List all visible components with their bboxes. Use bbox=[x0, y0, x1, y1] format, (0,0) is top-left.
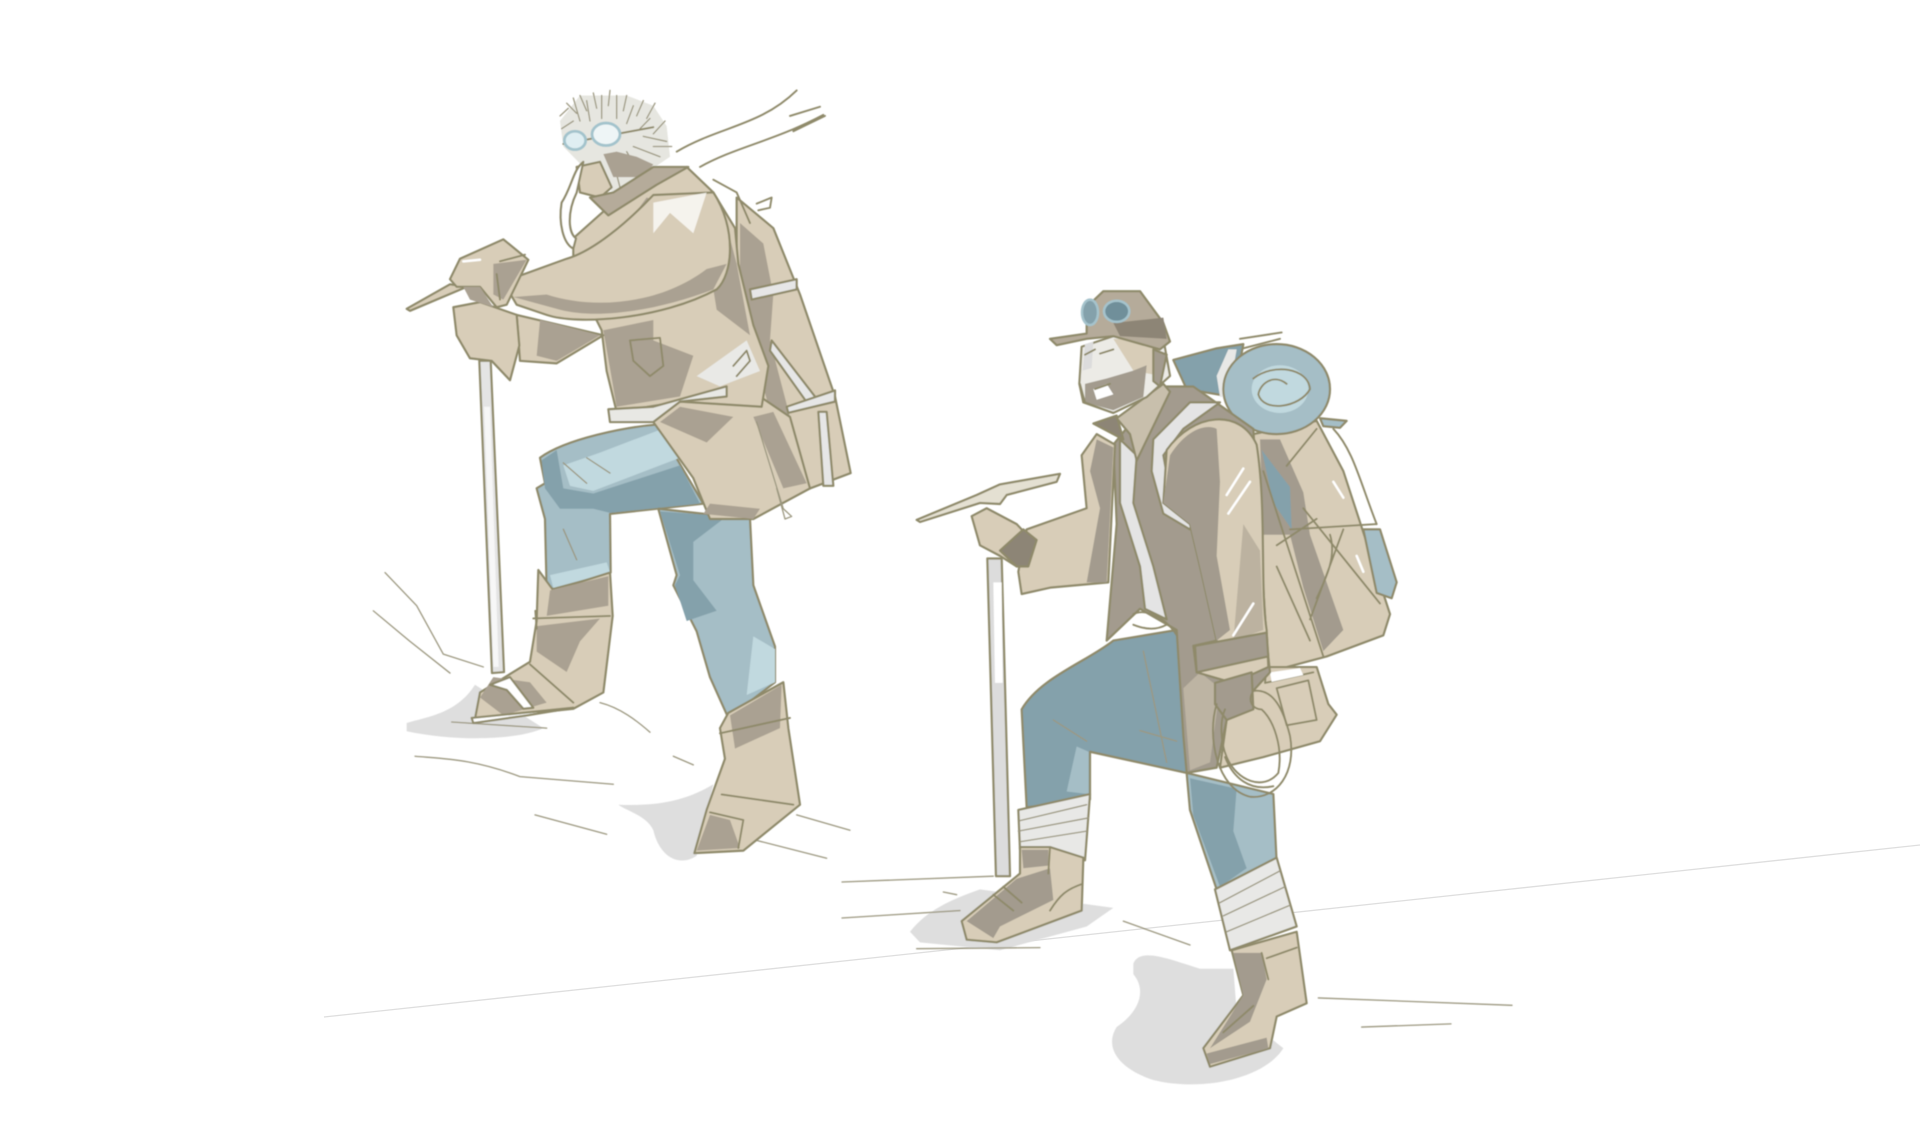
oxygen tank bbox=[713, 180, 851, 491]
standing leg bbox=[1187, 773, 1277, 889]
standing foot boot bbox=[1203, 932, 1307, 1067]
upper arm sleeve bbox=[503, 192, 730, 320]
head with hat, goggles and beard bbox=[1050, 291, 1170, 413]
long coat skirt bbox=[653, 397, 810, 519]
head with fur hood, goggles and oxygen mask bbox=[560, 90, 688, 249]
backpack bbox=[1240, 332, 1397, 672]
coat body bbox=[1093, 384, 1270, 773]
lower glove bbox=[453, 302, 519, 380]
satchel bbox=[1220, 667, 1337, 768]
lower arm sleeve bbox=[517, 315, 603, 363]
blue sleeping roll bbox=[1173, 344, 1347, 434]
coat upper body bbox=[573, 167, 768, 412]
hand with rope coil bbox=[1213, 672, 1291, 797]
leg wraps bbox=[1018, 794, 1297, 950]
raised leg bbox=[1022, 630, 1190, 807]
upper glove bbox=[450, 239, 528, 307]
raised foot boot bbox=[962, 847, 1083, 942]
raised foot boot bbox=[472, 570, 613, 723]
belt bbox=[608, 386, 727, 422]
raised leg bbox=[537, 425, 703, 590]
ground lines and shadows bbox=[842, 876, 1512, 1084]
standing leg bbox=[658, 509, 775, 718]
right sleeve and white strap bbox=[1152, 402, 1268, 683]
ground lines and shadows bbox=[373, 573, 850, 860]
standing foot boot bbox=[694, 682, 800, 853]
gloved hand bbox=[972, 508, 1027, 566]
glove cuff bbox=[1000, 529, 1037, 566]
ice axe bbox=[917, 474, 1060, 876]
ice axe bbox=[407, 284, 504, 673]
scarf bbox=[677, 90, 825, 167]
climber 1 with oxygen tank bbox=[373, 90, 851, 860]
climber 2 with backpack bbox=[842, 291, 1512, 1084]
left sleeve bbox=[1018, 434, 1115, 594]
horizon line bbox=[324, 845, 1920, 1017]
